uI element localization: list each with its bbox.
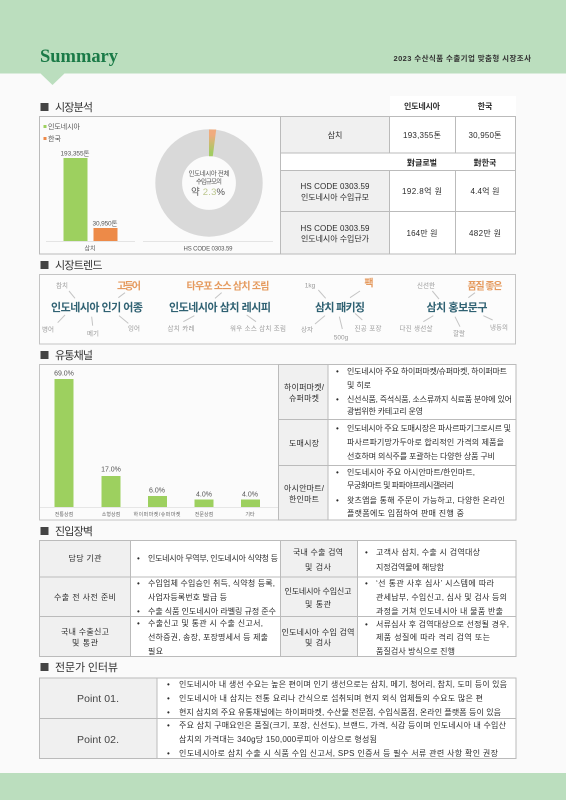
panel: distribution bar chart: 6.0%	[149, 488, 165, 494]
row: domestic quarantine: 및 검사	[305, 562, 332, 572]
keyword group: popular fish: 병어	[42, 324, 54, 334]
row: domestic export declaration	[61, 618, 268, 656]
row: wholesale market: 파사르파기망가두아로 합리적인 가격의 제품을	[347, 437, 504, 447]
row: Indonesia import quarantine: 서류심사 후 검역대상으로 선정될 경우,	[376, 619, 509, 629]
row: agency	[68, 553, 278, 563]
row: asian mart: •	[336, 496, 339, 505]
heading: distribution channel	[40, 349, 93, 362]
keyword group: recipes	[168, 280, 286, 332]
table: market comparison: HS CODE 0303.59	[300, 182, 370, 191]
row: Indonesia import declaration: 과정을 거쳐 인도네시아 내 물품 반출	[376, 606, 503, 616]
row: asian mart: 왓츠앱을 통해 주문이 가능하고, 다양한 온라인	[347, 495, 505, 505]
row: Indonesia import declaration: 및 통관	[305, 599, 332, 609]
row: asian mart: 인도네시아 주요 아시안마트/한인마트,	[347, 467, 475, 477]
row: wholesale market: 인도네시아 주요 도매시장은 파사르파기그로시르 및	[347, 423, 511, 433]
row: wholesale market: •	[336, 424, 339, 433]
row: hypermarket: 하이퍼마켓/	[284, 382, 325, 392]
panel: distribution bar chart: 4.0%	[196, 492, 212, 498]
panel: market trend keywords	[40, 274, 516, 344]
title: Summary	[40, 47, 119, 67]
table: market comparison: 對글로벌	[407, 158, 437, 168]
row: pre-export preparation: 사업자등록번호 발급 등	[148, 592, 227, 602]
keyword group: popular fish: 고등어	[117, 280, 141, 292]
row: asian mart	[284, 467, 505, 518]
bar chart: volume: 30,950톤	[92, 220, 118, 228]
row: hypermarket: 신선식품, 즉석식품, 소스류까지 식료품 분야에 있어	[347, 394, 512, 404]
row: domestic export declaration: 필요	[148, 646, 163, 656]
keyword group: promotion phrases: 다진 생선살	[400, 324, 433, 332]
row: point 01: 현지 삼치의 주요 유통채널에는 하이퍼마켓, 수산물 전문점, 수입식품점, 온라인 플랫폼 등이 있음	[179, 707, 501, 717]
row: hypermarket: 광범위한 카테고리 운영	[347, 406, 423, 416]
row: Indonesia import quarantine: 인도네시아 수입 검역	[282, 627, 354, 637]
row: Indonesia import declaration	[284, 578, 507, 616]
keyword group: popular fish: 인도네시아 인기 어종	[51, 300, 143, 314]
keyword group: recipes: 타우포 소스 삼치 조림	[186, 280, 270, 292]
row: Indonesia import declaration: •	[365, 579, 368, 588]
table: market comparison: 한국	[478, 101, 493, 111]
row: agency: 담당 기관	[68, 553, 102, 563]
row: wholesale market: 도매시장	[289, 438, 320, 448]
panel: distribution bar chart: 기타	[245, 511, 255, 518]
table: market comparison: 삼치	[328, 130, 342, 140]
row: domestic quarantine: •	[365, 548, 368, 557]
bar chart: volume	[46, 150, 135, 252]
row: point 02: Point 02.	[77, 734, 119, 746]
table: market comparison: 192.8억 원	[402, 186, 442, 196]
row: Indonesia import declaration: 관세납부, 수입신고, 심사 및 검사 등의	[376, 592, 507, 602]
footer band	[0, 773, 566, 800]
panel: distribution bar chart	[40, 364, 278, 520]
keyword group: promotion phrases: 할랄	[453, 328, 465, 338]
donut chart: import share: 인도네시아 전체	[188, 168, 230, 178]
row: pre-export preparation: •	[137, 607, 140, 616]
keyword group: promotion phrases: 냉동의	[490, 322, 508, 332]
row: pre-export preparation: 수입업체 수입승인 취득, 식약청 등록,	[148, 578, 275, 588]
row: point 02: •	[167, 749, 170, 758]
row: hypermarket: •	[336, 367, 339, 376]
keyword group: popular fish: 참치	[56, 280, 68, 290]
report subtitle: 2023 수산식품 수출기업 맞춤형 시장조사	[394, 53, 531, 63]
keyword group: promotion phrases: 품질 좋은	[468, 280, 502, 292]
row: point 01	[77, 679, 507, 717]
row: agency: •	[137, 554, 140, 563]
row: hypermarket: 인도네시아 주요 하이퍼마켓/슈퍼마켓, 하이퍼마트	[347, 366, 507, 376]
row: wholesale market: 선호하며 의식주를 포괄하는 다양한 상품 구비	[347, 451, 495, 461]
row: point 01: •	[167, 694, 170, 703]
row: Indonesia import quarantine: 품질검사 방식으로 진행	[376, 646, 455, 656]
row: pre-export preparation: 수출 식품 인도네시아 라벨링 규정 준수	[148, 606, 276, 616]
keyword group: packaging: 진공 포장	[354, 324, 382, 332]
row: point 02: 인도네시아로 삼치 수출 시 식품 수입 신고서, SPS 인증서 등 필수 서류 관련 사항 확인 권장	[179, 748, 499, 758]
table: market comparison: 193,355톤	[403, 131, 441, 140]
row: domestic quarantine	[293, 547, 481, 572]
donut chart: import share: 수입규모의	[196, 176, 222, 186]
donut chart: import share: HS CODE 0303.59	[184, 246, 233, 252]
legend: 한국	[48, 135, 62, 143]
panel: distribution bar chart: 소형상점	[102, 511, 120, 518]
table: market comparison: 인도네시아 수입단가	[301, 234, 370, 244]
keyword group: promotion phrases: 삼치 홍보문구	[426, 300, 488, 314]
row: point 01: •	[167, 680, 170, 689]
keyword group: recipes: 워우 소스 삼치 조림	[230, 324, 286, 332]
keyword group: promotion phrases	[400, 280, 508, 338]
table: expert interview	[40, 678, 516, 758]
heading: entry barriers: 진입장벽	[55, 525, 93, 538]
table: market comparison: 4.4억 원	[470, 186, 500, 196]
heading: expert interview: 전문가 인터뷰	[55, 661, 118, 674]
row: domestic export declaration: 국내 수출신고	[61, 626, 109, 636]
keyword group: popular fish	[42, 280, 143, 338]
row: domestic export declaration: 및 통관	[72, 638, 99, 648]
row: Indonesia import quarantine: 제품 성질에 따라 격리 검역 또는	[376, 632, 490, 642]
table: market comparison: 30,950톤	[468, 131, 502, 140]
keyword group: packaging	[301, 278, 382, 342]
keyword group: packaging: 상자	[301, 324, 313, 334]
row: pre-export preparation: •	[137, 579, 140, 588]
row: point 01: 인도네시아 내 생선 수요는 높은 편이며 인기 생선으로는 삼치, 메기, 청어리, 참치, 도미 등이 있음	[179, 679, 507, 689]
row: asian mart: 한인마트	[289, 494, 319, 504]
legend: 인도네시아	[48, 122, 81, 131]
row: hypermarket: 슈퍼마켓	[289, 393, 319, 403]
row: Indonesia import declaration: ‘선 통관 사후 심사’ 시스템에 따라	[376, 578, 495, 588]
table: market comparison: 인도네시아 수입규모	[301, 192, 369, 202]
row: domestic export declaration: 수출신고 및 통관 시 수출 신고서,	[148, 618, 263, 628]
table: entry barriers	[40, 540, 516, 656]
panel: distribution bar chart: 4.0%	[242, 492, 258, 498]
table: market comparison: 482만 원	[469, 229, 501, 238]
row: agency: 인도네시아 무역부, 인도네시아 식약청 등	[148, 553, 278, 563]
row: point 01: •	[167, 708, 170, 717]
row: pre-export preparation	[54, 578, 276, 616]
row: asian mart: 플랫폼에도 입점하여 판매 진행 중	[347, 508, 464, 518]
row: Indonesia import declaration: 인도네시아 수입신고	[284, 586, 352, 596]
row: domestic quarantine: 국내 수출 검역	[293, 547, 343, 557]
row: hypermarket: •	[336, 395, 339, 404]
heading: market trend: 시장트렌드	[55, 259, 102, 272]
keyword group: recipes: 인도네시아 삼치 레시피	[169, 300, 271, 314]
row: asian mart: 아시안마트/	[284, 483, 325, 493]
row: point 02: 삼치의 가격대는 340g당 150,000루피아 이상으로 형성됨	[179, 734, 377, 744]
heading: entry barriers	[40, 525, 93, 538]
row: hypermarket	[284, 366, 512, 416]
row: asian mart: 무궁화마트 및 파파야프레시갤러리	[347, 480, 454, 490]
row: pre-export preparation: 수출 전 사전 준비	[54, 592, 116, 602]
row: domestic export declaration: •	[137, 619, 140, 628]
panel: distribution bar chart: 전통상점	[55, 511, 73, 518]
row: point 01: Point 01.	[77, 693, 119, 705]
header band	[0, 0, 566, 85]
table: market comparison: 164만 원	[406, 229, 438, 238]
row: point 02: 주요 삼치 구매요인은 품질(크기, 포장, 신선도), 브랜드, 가격, 식감 등이며 인도네시아 내 수입산	[179, 720, 507, 730]
row: Indonesia import quarantine: 및 검사	[305, 638, 332, 648]
row: point 02: •	[167, 721, 170, 730]
table: market comparison: 對한국	[474, 158, 497, 168]
heading: distribution channel: 유통채널	[55, 349, 93, 362]
row: Indonesia import quarantine: •	[365, 620, 368, 629]
row: domestic quarantine: 지정검역물에 해당함	[376, 562, 445, 572]
row: wholesale market	[289, 423, 511, 461]
bar chart: volume: 삼치	[84, 244, 96, 252]
keyword group: packaging: 팩	[364, 278, 374, 290]
row: asian mart: •	[336, 468, 339, 477]
legend	[44, 122, 81, 143]
table: market comparison	[280, 96, 516, 254]
panel: distribution bar chart: 하이퍼마켓/슈퍼마켓	[134, 511, 181, 518]
table: market comparison: 인도네시아	[404, 101, 441, 111]
panel: market analysis charts	[40, 116, 280, 254]
row: domestic quarantine: 고객사 삼치, 수출 시 검역대상	[376, 547, 481, 557]
keyword group: promotion phrases: 신선한	[417, 280, 435, 290]
panel: distribution bar chart: 17.0%	[101, 466, 121, 474]
donut chart: import share	[143, 130, 273, 252]
keyword group: packaging: 삼치 패키징	[315, 300, 365, 314]
panel: distribution bar chart: 전문상점	[195, 511, 213, 518]
bar chart: volume: 193,355톤	[60, 150, 90, 158]
row: point 02	[77, 720, 507, 758]
table: market comparison: HS CODE 0303.59	[300, 224, 370, 233]
keyword group: popular fish: 메기	[87, 328, 99, 338]
keyword group: packaging: 500g	[334, 334, 349, 342]
row: Indonesia import quarantine	[282, 619, 509, 656]
donut chart: import share: 약 2.3%	[191, 186, 226, 198]
heading: market analysis	[40, 101, 93, 114]
row: point 01: 인도네시아 내 삼치는 전통 요리나 간식으로 섭취되며 현지 외식 업체들의 수요도 많은 편	[179, 693, 483, 703]
row: domestic export declaration: 선하증권, 송장, 포장명세서 등 제출	[148, 632, 268, 642]
keyword group: popular fish: 잉어	[128, 324, 140, 332]
row: hypermarket: 및 히로	[347, 380, 371, 390]
keyword group: packaging: 1kg	[305, 282, 316, 290]
keyword group: recipes: 삼치 카레	[168, 324, 195, 332]
heading: market analysis: 시장분석	[55, 101, 93, 114]
panel: distribution bar chart: 69.0%	[54, 370, 74, 378]
table: distribution channels	[278, 364, 516, 520]
